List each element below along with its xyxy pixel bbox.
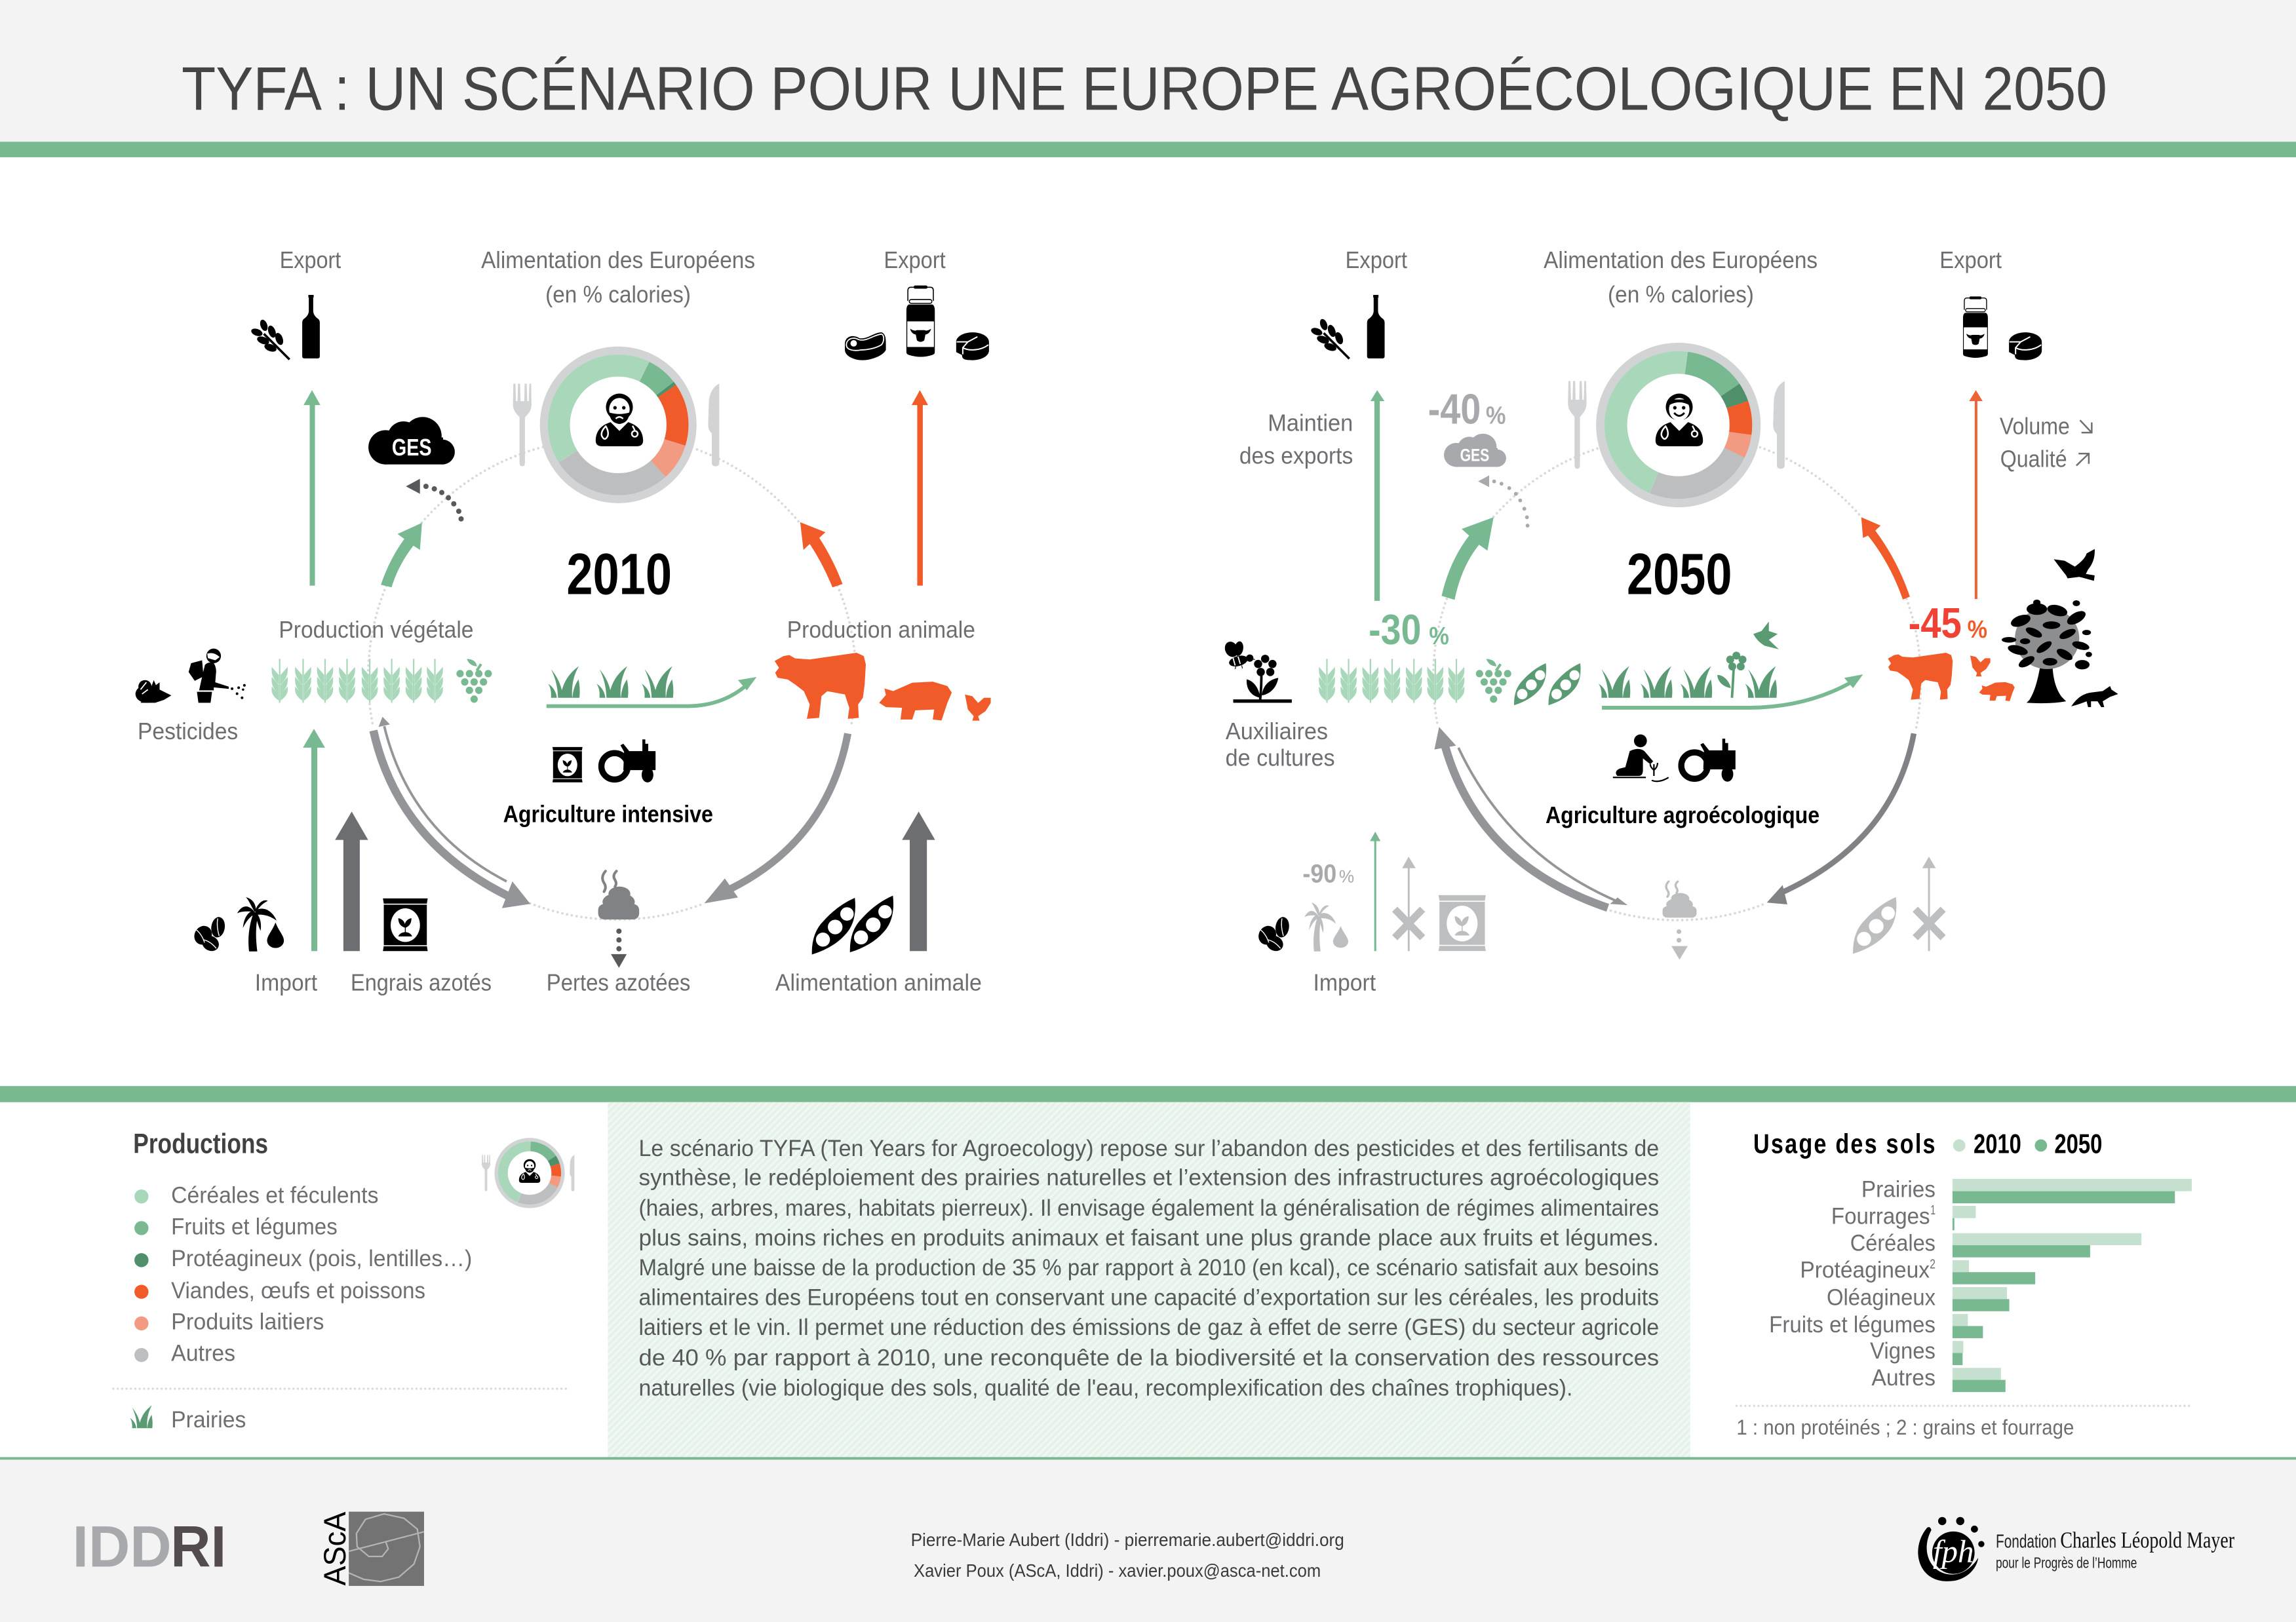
panel: 2050 agroecological agriculture diagram xyxy=(1222,247,2118,996)
arrow: export animal xyxy=(912,390,928,586)
labels: bottom row: Import xyxy=(255,970,317,996)
chart heading and legend: 2010 xyxy=(1974,1129,2021,1159)
bar chart: 1 xyxy=(1930,1203,1936,1218)
legend items: Viandes, œufs et poissons xyxy=(171,1278,425,1303)
icons: soy pods xyxy=(800,892,906,961)
summary paragraph: alimentaires des Européens tout en conservant une capacité d’exportation sur les céréales, les produits xyxy=(638,1284,1659,1310)
label: alimentation xyxy=(481,247,755,308)
icons: cow hen pig xyxy=(1888,653,2015,701)
arrow: animal to plate xyxy=(800,522,842,587)
label: agriculture intensive: Agriculture intensive xyxy=(503,801,713,828)
footer band xyxy=(0,1457,2296,1622)
label: alimentation: Alimentation des Européens xyxy=(481,247,755,273)
legend items: Protéagineux (pois, lentilles…) xyxy=(171,1246,472,1271)
icon: GES cloud xyxy=(1444,434,1506,467)
stat: -30 %: -30 xyxy=(1369,606,1421,653)
green band xyxy=(0,1086,2296,1102)
summary paragraph: laitiers et le vin. Il permet une réduction des émissions de gaz à effet de serre (GES) du secteur agricole xyxy=(638,1315,1659,1340)
icon: bee and flower xyxy=(1222,640,1292,703)
icon: fertilizer bag grey xyxy=(1439,895,1486,951)
legend items: Produits laitiers xyxy=(171,1309,324,1334)
labels: bottom row xyxy=(255,970,982,996)
labels: bottom row: Pertes azotées xyxy=(547,970,690,996)
logo: FPH: Charles Léopold Mayer xyxy=(2060,1528,2235,1553)
summary paragraph: naturelles (vie biologique des sols, qualité de l'eau, recomplexification des chaînes trophiques). xyxy=(638,1376,1572,1401)
arrow: loss left double xyxy=(1434,727,1627,908)
icon: pesticide sprayer xyxy=(189,649,246,703)
contact details xyxy=(911,1530,1344,1581)
summary paragraph: plus sains, moins riches en produits animaux et faisant une plus grande place aux fruits et légumes. xyxy=(638,1226,1659,1251)
arrow: vegetal to plate xyxy=(1441,517,1494,600)
arrow: export vegetal xyxy=(303,390,321,586)
panel: summary text xyxy=(608,1102,1690,1458)
icon: wheat ear and wine bottle xyxy=(1310,295,1385,358)
labels: bottom row: Engrais azotés xyxy=(351,970,492,996)
icons: coffee, palm, drop xyxy=(191,897,284,954)
arrow: export animal xyxy=(1969,390,1983,599)
arrow: engrais xyxy=(335,811,368,951)
label: production végétale: Production végétale xyxy=(279,617,473,643)
legend: prairies xyxy=(130,1405,246,1433)
icons: cow pig hen xyxy=(775,653,991,721)
arrow: import reduced xyxy=(1370,832,1380,951)
stat: -90 %: -90 xyxy=(1302,859,1336,889)
footnote: 1 : non protéinés ; 2 : grains et fourrage xyxy=(1736,1416,2074,1439)
label: alimentation xyxy=(1544,247,1818,308)
logo: IDDRI: RI xyxy=(170,1513,226,1579)
icon: pest xyxy=(136,680,171,703)
label: auxiliaires de cultures xyxy=(1226,718,1335,771)
year 2050: 2050 xyxy=(1627,541,1732,607)
bar chart: Céréales xyxy=(1850,1231,1936,1256)
icons: fertilizer bag and tractor xyxy=(553,739,655,782)
label: import: Import xyxy=(1313,970,1376,996)
contact details: Xavier Poux (AScA, Iddri) - xavier.poux@asca-net.com xyxy=(914,1560,1321,1581)
bar chart: Autres xyxy=(1871,1365,1936,1391)
contact details: Pierre-Marie Aubert (Iddri) - pierremarie.aubert@iddri.org xyxy=(911,1530,1344,1550)
summary paragraph: synthèse, le redéploiement des prairies naturelles et l’extension des infrastructures agroécologiques xyxy=(638,1165,1659,1191)
summary paragraph: Malgré une baisse de la production de 35 % par rapport à 2010 (en kcal), ce scénario satisfait aux besoins xyxy=(638,1255,1659,1281)
icon: fox xyxy=(2071,686,2118,707)
legend items xyxy=(134,1183,472,1366)
bar chart: Fourrages xyxy=(1831,1203,1930,1229)
chart heading and legend xyxy=(1753,1129,2102,1159)
label: alimentation: Alimentation des Européens xyxy=(1544,247,1818,273)
label: export right: Export xyxy=(884,247,946,273)
legend items: Autres xyxy=(171,1341,235,1366)
bar chart: 2 xyxy=(1930,1257,1936,1271)
icon: nitrogen pile xyxy=(1663,881,1696,917)
icons: grass row xyxy=(548,666,673,698)
label: pesticides: Pesticides xyxy=(138,718,238,744)
logo: FPH: pour le Progrès de l’Homme xyxy=(1996,1554,2137,1572)
stat: -30 %: % xyxy=(1429,623,1449,650)
label: volume qualité xyxy=(2000,414,2092,473)
bar chart: Protéagineux xyxy=(1800,1258,1930,1283)
label: export right: Export xyxy=(1939,247,2002,273)
labels: bottom row: Alimentation animale xyxy=(775,970,982,996)
arrow: import xyxy=(303,729,325,951)
bar chart: Prairies xyxy=(1861,1177,1936,1203)
title: TYFA : UN SCÉNARIO POUR UNE EUROPE AGROÉCOLOGIQUE EN 2050 xyxy=(182,54,2107,123)
logo: FPH: Fondation xyxy=(1996,1532,2057,1553)
legend items: Céréales et féculents xyxy=(171,1183,379,1208)
arrow: vegetal to plate xyxy=(381,523,422,587)
arrow: loss right xyxy=(705,733,848,903)
label: maintien des exports xyxy=(1239,410,1353,469)
arrow: engrais crossed xyxy=(1395,857,1422,951)
label: alimentation: (en % calories) xyxy=(545,282,691,308)
arrow: alimentation animale xyxy=(902,811,935,951)
label: export left: Export xyxy=(1346,247,1407,273)
stat: -90 %: % xyxy=(1339,867,1354,887)
stat: -45 %: -45 xyxy=(1909,599,1962,647)
icons: farmer and tractor xyxy=(1613,735,1736,782)
label: agriculture agroécologique: Agriculture agroécologique xyxy=(1546,802,1819,828)
plate chart 2050 xyxy=(1568,343,1785,507)
icon: soy pod grey xyxy=(1842,893,1910,960)
arrow: loss left double xyxy=(374,717,530,908)
logo: IDDRI: IDD xyxy=(73,1513,172,1579)
label: auxiliaires de cultures: Auxiliaires xyxy=(1226,718,1328,744)
label: export left: Export xyxy=(280,247,341,273)
summary paragraph xyxy=(638,1136,1659,1401)
chart heading and legend: Usage des sols xyxy=(1753,1129,1937,1159)
label: production animale: Production animale xyxy=(787,617,975,643)
mini plate legend xyxy=(482,1138,574,1208)
icons: coffee, palm, drop xyxy=(1255,902,1348,954)
icon: fertilizer bag xyxy=(383,898,428,951)
icon: tree xyxy=(2002,600,2092,703)
arrow: grass to animals xyxy=(547,677,756,706)
stat: -40 % GES: % xyxy=(1486,402,1506,429)
arrow: export vegetal xyxy=(1371,390,1384,601)
label: maintien des exports: Maintien xyxy=(1268,410,1353,436)
summary paragraph: Le scénario TYFA (Ten Years for Agroecology) repose sur l’abandon des pesticides et des fertilisants de xyxy=(638,1136,1659,1161)
icon: wheat ear and wine bottle xyxy=(250,295,320,359)
heading: Productions xyxy=(133,1128,268,1159)
label: auxiliaires de cultures: de cultures xyxy=(1226,744,1335,771)
logo: FPH xyxy=(1918,1517,2235,1581)
icon: GES cloud: GES xyxy=(392,434,432,461)
label: maintien des exports: des exports xyxy=(1239,443,1353,469)
arrow: nitrogen loss xyxy=(611,929,627,968)
icon: owl xyxy=(2053,549,2095,581)
arrow: animal to plate xyxy=(1861,517,1910,600)
label: volume qualité: Volume xyxy=(2000,414,2070,440)
legend items: Fruits et légumes xyxy=(171,1214,338,1240)
arrow: GES dotted xyxy=(406,479,464,522)
chart heading and legend: 2050 xyxy=(2054,1129,2102,1159)
icons: grass, flower and bird xyxy=(1599,621,1779,698)
title band xyxy=(0,0,2296,157)
panel: usage des sols xyxy=(1736,1129,2192,1439)
arrow: grass to animals xyxy=(1602,674,1863,708)
icons: wheat row and grape xyxy=(271,659,492,703)
summary paragraph: de 40 % par rapport à 2010, une reconquête de la biodiversité et la conservation des ressources xyxy=(638,1345,1659,1371)
logo: AScA xyxy=(318,1511,424,1586)
icon: GES cloud xyxy=(368,417,455,465)
bar chart: Fruits et légumes xyxy=(1769,1312,1936,1338)
bar chart: Oléagineux xyxy=(1827,1284,1936,1310)
arrow: nitrogen loss xyxy=(1671,929,1688,959)
icon: GES cloud: GES xyxy=(1460,446,1489,465)
icon: nitrogen pile xyxy=(598,871,639,919)
arrow: loss right xyxy=(1767,733,1914,904)
stat: -40 % GES: -40 xyxy=(1428,385,1481,433)
year 2010: 2010 xyxy=(566,541,672,607)
arrow: alimentation crossed xyxy=(1915,857,1943,951)
panel: 2010 intensive agriculture diagram xyxy=(136,247,991,996)
logo: FPH: fph xyxy=(1933,1534,1974,1570)
icons: meat, milk can, cheese xyxy=(845,286,989,360)
plate chart 2010 xyxy=(513,343,719,507)
summary paragraph: (haies, arbres, mares, habitats pierreux). Il envisage également la généralisation de régimes alimentaires xyxy=(638,1195,1659,1221)
logo: AScA: AScA xyxy=(318,1511,352,1585)
label: volume qualité: Qualité xyxy=(2000,446,2067,473)
icons: wheat, grape and pods xyxy=(1319,659,1591,710)
label: alimentation: (en % calories) xyxy=(1608,282,1754,308)
icons: milk can, cheese xyxy=(1963,296,2042,360)
legend: prairies: Prairies xyxy=(171,1407,246,1433)
bar chart xyxy=(1769,1177,2192,1392)
stat: -45 %: % xyxy=(1968,616,1987,644)
logo: IDDRI xyxy=(73,1513,226,1579)
bar chart: Vignes xyxy=(1870,1338,1936,1364)
arrow: GES dotted xyxy=(1478,475,1529,528)
panel: legend productions xyxy=(113,1128,574,1433)
